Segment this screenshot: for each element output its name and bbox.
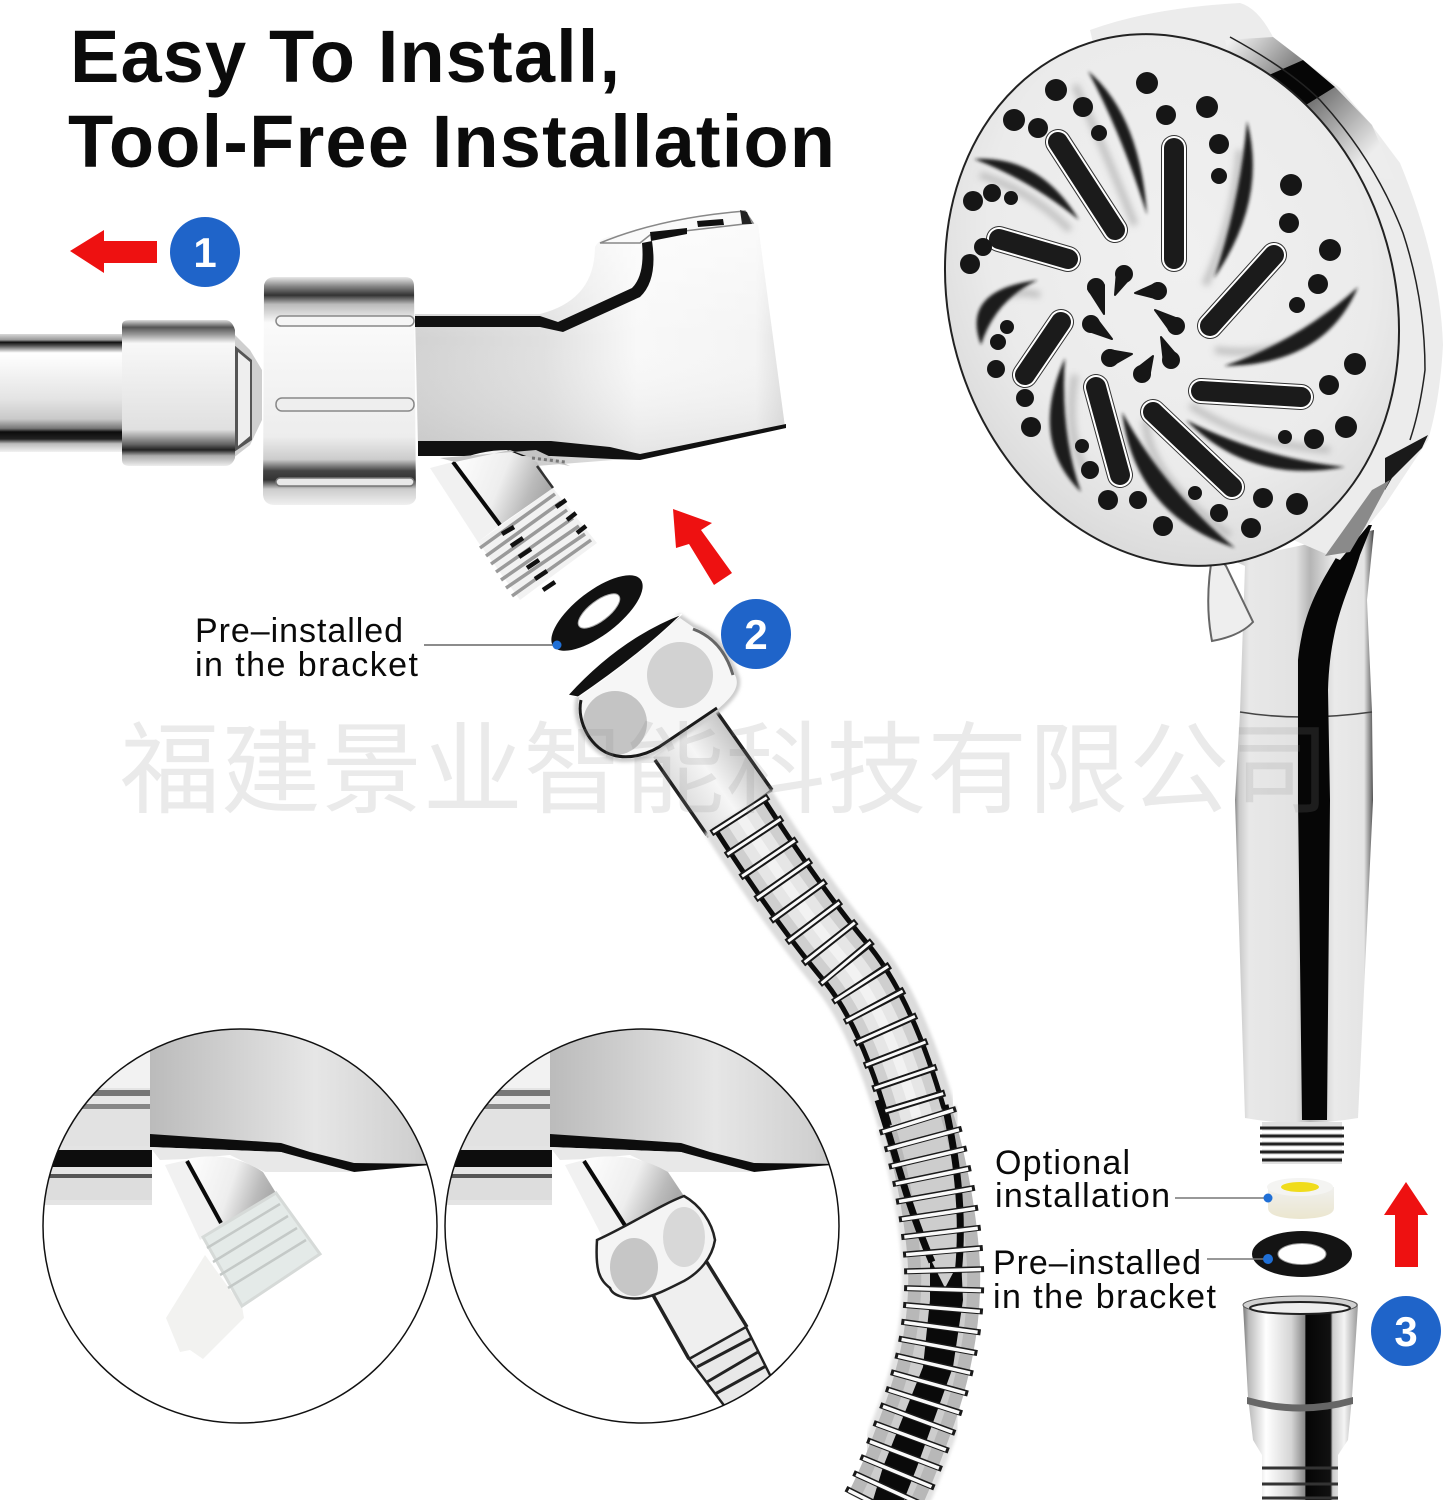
hose end connector	[1243, 1296, 1358, 1500]
title	[68, 15, 835, 183]
lower reflection	[418, 424, 786, 460]
watermark: 福建景业智能科技有限公司	[120, 689, 1330, 834]
thread tape	[1267, 1178, 1334, 1219]
step 3 arrow	[1384, 1182, 1428, 1267]
head threaded connector	[1260, 1122, 1344, 1164]
swirl shadows	[980, 85, 1330, 535]
long spray slots	[999, 142, 1301, 487]
shower head	[877, 0, 1454, 1164]
arm	[188, 1156, 276, 1224]
hose	[653, 712, 963, 1500]
corrugated hose lower	[870, 1100, 963, 1500]
thread	[478, 488, 597, 600]
corrugated hose upper	[738, 812, 917, 1118]
nut	[597, 1196, 715, 1298]
callout: pre-installed washer: in the bracket	[993, 1278, 1217, 1316]
step 1 arrow	[70, 230, 157, 273]
arm	[453, 450, 553, 525]
swirl crescents	[974, 71, 1358, 548]
bracket body	[415, 210, 786, 466]
callout: optional installation: installation	[995, 1177, 1170, 1215]
washer: head	[1252, 1231, 1352, 1277]
step 1 badge: 1	[193, 229, 217, 276]
chrome hose pipe	[0, 334, 124, 452]
dark reflection	[415, 241, 654, 332]
threaded spout	[430, 450, 597, 600]
washer: bracket	[540, 562, 654, 664]
callout: optional installation: Optional	[995, 1144, 1130, 1182]
bracket assembly	[0, 210, 786, 600]
handle	[1232, 525, 1374, 1123]
central teardrop nozzles	[1083, 266, 1184, 382]
reflection stripes	[878, 1100, 932, 1262]
detail circle: nut fitted	[444, 1028, 840, 1424]
hose ridges	[688, 1326, 771, 1406]
callout: pre-installed washer	[993, 1244, 1273, 1316]
callout: bracket washer: Pre–installed	[195, 612, 403, 650]
step 3 badge	[1371, 1296, 1441, 1366]
handle black reflection	[1298, 525, 1372, 1120]
faded left side	[430, 462, 500, 542]
detail circle: thread tape wrapped	[42, 1028, 438, 1424]
step 2 badge	[721, 599, 791, 669]
top rim opening	[600, 211, 753, 243]
hex joint	[228, 328, 262, 462]
step 1 badge	[170, 217, 240, 287]
lower pipe	[656, 1264, 744, 1357]
callout: bracket washer: in the bracket	[195, 646, 419, 684]
round spray nozzles	[960, 72, 1366, 538]
tape tail	[166, 1255, 244, 1359]
hose nut	[568, 614, 737, 759]
callout: pre-installed washer: Pre–installed	[993, 1244, 1201, 1282]
callout: bracket washer	[195, 612, 562, 684]
wrapped tape	[203, 1193, 320, 1306]
head face	[877, 0, 1454, 625]
step 3 badge: 3	[1394, 1308, 1418, 1355]
step 2 arrow	[673, 509, 732, 585]
large knurled nut	[263, 277, 416, 505]
rim reflection bands	[1225, 37, 1428, 556]
head back rim	[1090, 3, 1443, 560]
collar	[122, 320, 235, 466]
trigger tab	[1208, 552, 1253, 641]
step 2 badge: 2	[744, 611, 768, 658]
title: Easy To Install,	[70, 15, 620, 98]
arm	[584, 1156, 684, 1227]
faded arm side	[165, 1160, 224, 1240]
neck tube	[653, 712, 772, 837]
callout: optional installation	[995, 1144, 1272, 1215]
faded arm side	[565, 1160, 622, 1236]
title: Tool-Free Installation	[68, 100, 835, 183]
